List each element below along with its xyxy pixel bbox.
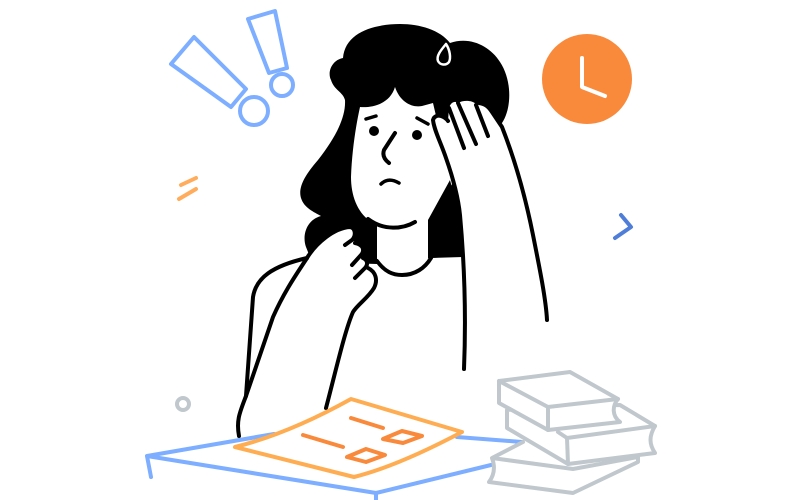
stack of books — [489, 372, 655, 493]
paper lines — [303, 418, 383, 447]
inner forearm line — [326, 268, 376, 408]
raised arm outline and index finger — [433, 116, 465, 369]
hair behind raised arm — [428, 180, 463, 258]
left hand finger lines — [352, 243, 367, 278]
body — [238, 227, 467, 436]
mouth — [381, 180, 399, 184]
checkboxes — [347, 431, 422, 462]
neck — [377, 215, 428, 274]
left eyebrow — [366, 116, 376, 119]
outer arm line — [479, 103, 547, 320]
nose — [383, 133, 395, 163]
icon: large exclamation mark — [171, 37, 268, 125]
woman figure — [238, 24, 547, 436]
face — [351, 87, 452, 227]
right eyebrow — [417, 118, 428, 124]
test paper — [235, 399, 462, 477]
finger lines — [449, 103, 488, 148]
chin — [368, 219, 415, 228]
icon: blue chevron — [615, 215, 631, 238]
left eye — [369, 126, 379, 136]
right eye — [412, 130, 422, 140]
back line — [246, 258, 307, 396]
middle book — [507, 405, 655, 464]
bottom book — [489, 442, 638, 493]
collar line — [377, 258, 431, 275]
top book — [499, 372, 620, 430]
icon: small exclamation mark — [248, 11, 293, 96]
icon: orange clock — [542, 34, 632, 124]
icon: small grey ring — [177, 398, 189, 410]
desk — [147, 434, 522, 500]
arm outer line and thumb — [238, 227, 355, 436]
sweat drop — [438, 44, 450, 65]
raised arm — [433, 101, 547, 369]
icon: orange dashes — [179, 178, 196, 199]
hair — [300, 24, 509, 264]
